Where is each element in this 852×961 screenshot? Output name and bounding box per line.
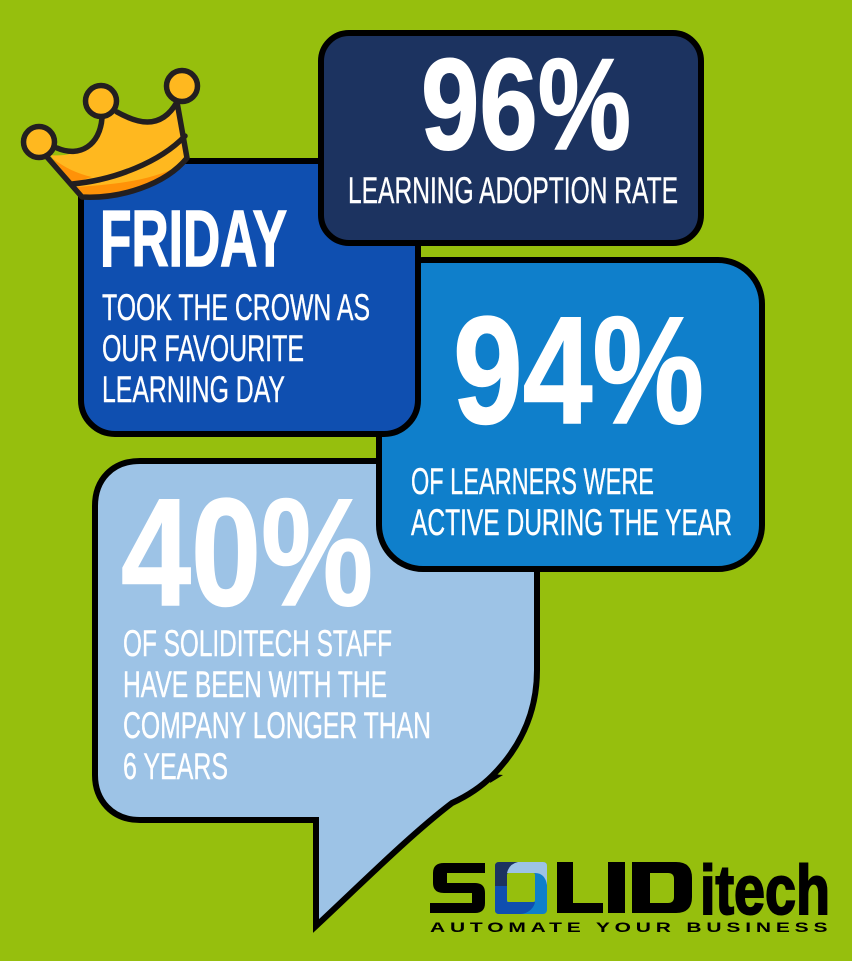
text: Friday description: LEARNING DAY [102,369,285,410]
heading: Friday: FRIDAY [100,194,287,283]
icon: crown [24,70,198,197]
text: learners description: OF LEARNERS WERE [411,461,654,502]
stat: 94%: 94% [453,285,704,456]
panel: 40% staff speech bubble [95,461,537,926]
panel: Friday favourite learning day [81,161,418,434]
text: staff description [123,623,431,787]
logo: SOLIDitech [430,851,830,935]
text: Friday description [102,287,370,410]
logo letter S [430,863,485,913]
logo tagline: AUTOMATE YOUR BUSINESS [430,919,828,935]
stat: 96%: 96% [421,31,631,177]
text: Friday description: OUR FAVOURITE [102,328,304,369]
text: staff description: OF SOLIDITECH STAFF [123,623,392,664]
text: learners description [411,461,732,543]
stat: 40%: 40% [121,467,373,638]
text: staff description: 6 YEARS [123,746,228,787]
panel: 96% adoption rate [321,31,701,243]
panel: 94% active learners [379,260,762,569]
text: staff description: HAVE BEEN WITH THE [123,664,387,705]
text: Friday description: TOOK THE CROWN AS [102,287,370,328]
text: adoption description: LEARNING ADOPTION RATE [348,170,678,211]
logo letters LID [557,862,603,913]
text: staff description: COMPANY LONGER THAN [123,705,431,746]
logo icon: O square [495,862,547,914]
